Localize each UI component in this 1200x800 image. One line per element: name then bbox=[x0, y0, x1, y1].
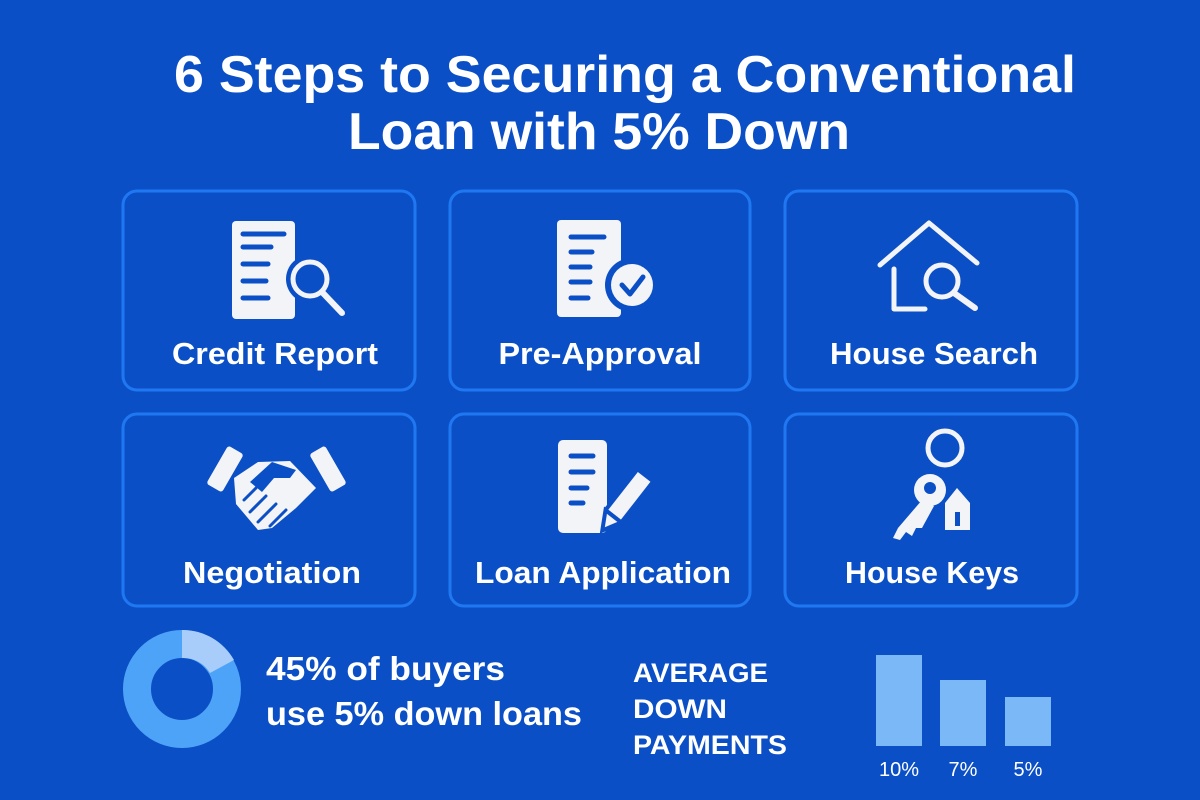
stat text bbox=[266, 650, 582, 732]
icon: keys bbox=[893, 431, 970, 540]
bar chart bbox=[876, 655, 1051, 781]
chart heading bbox=[633, 658, 787, 760]
bar chart: 5% bbox=[1014, 759, 1043, 781]
label: House Keys bbox=[845, 555, 1019, 590]
title: 6 Steps to Securing a Conventional bbox=[174, 46, 1076, 104]
icon: document with pencil bbox=[558, 440, 653, 537]
chart: donut bbox=[137, 630, 234, 734]
stat text: use 5% down loans bbox=[266, 695, 582, 732]
label: Pre-Approval bbox=[498, 336, 702, 371]
stat text: 45% of buyers bbox=[266, 650, 505, 687]
panel: credit report bbox=[123, 191, 415, 390]
bar chart: 7% bbox=[949, 759, 978, 781]
label: House Search bbox=[830, 336, 1038, 371]
title bbox=[174, 46, 1076, 161]
panel: house keys bbox=[785, 414, 1077, 606]
panel: negotiation bbox=[123, 414, 415, 606]
panel: loan application bbox=[450, 414, 750, 606]
label: Negotiation bbox=[183, 555, 361, 590]
bar chart: 10% bbox=[879, 759, 919, 781]
title: Loan with 5% Down bbox=[348, 103, 850, 161]
panel: house search bbox=[785, 191, 1077, 390]
icon: document with magnifier bbox=[232, 221, 342, 319]
chart heading: DOWN bbox=[633, 694, 727, 724]
chart heading: AVERAGE bbox=[633, 658, 768, 688]
label: Credit Report bbox=[172, 336, 378, 371]
icon: handshake bbox=[206, 445, 347, 530]
panel: pre-approval bbox=[450, 191, 750, 390]
chart heading: PAYMENTS bbox=[633, 730, 787, 760]
label: Loan Application bbox=[475, 555, 731, 590]
icon: house with magnifier bbox=[880, 223, 977, 309]
icon: document with check bbox=[557, 220, 659, 317]
